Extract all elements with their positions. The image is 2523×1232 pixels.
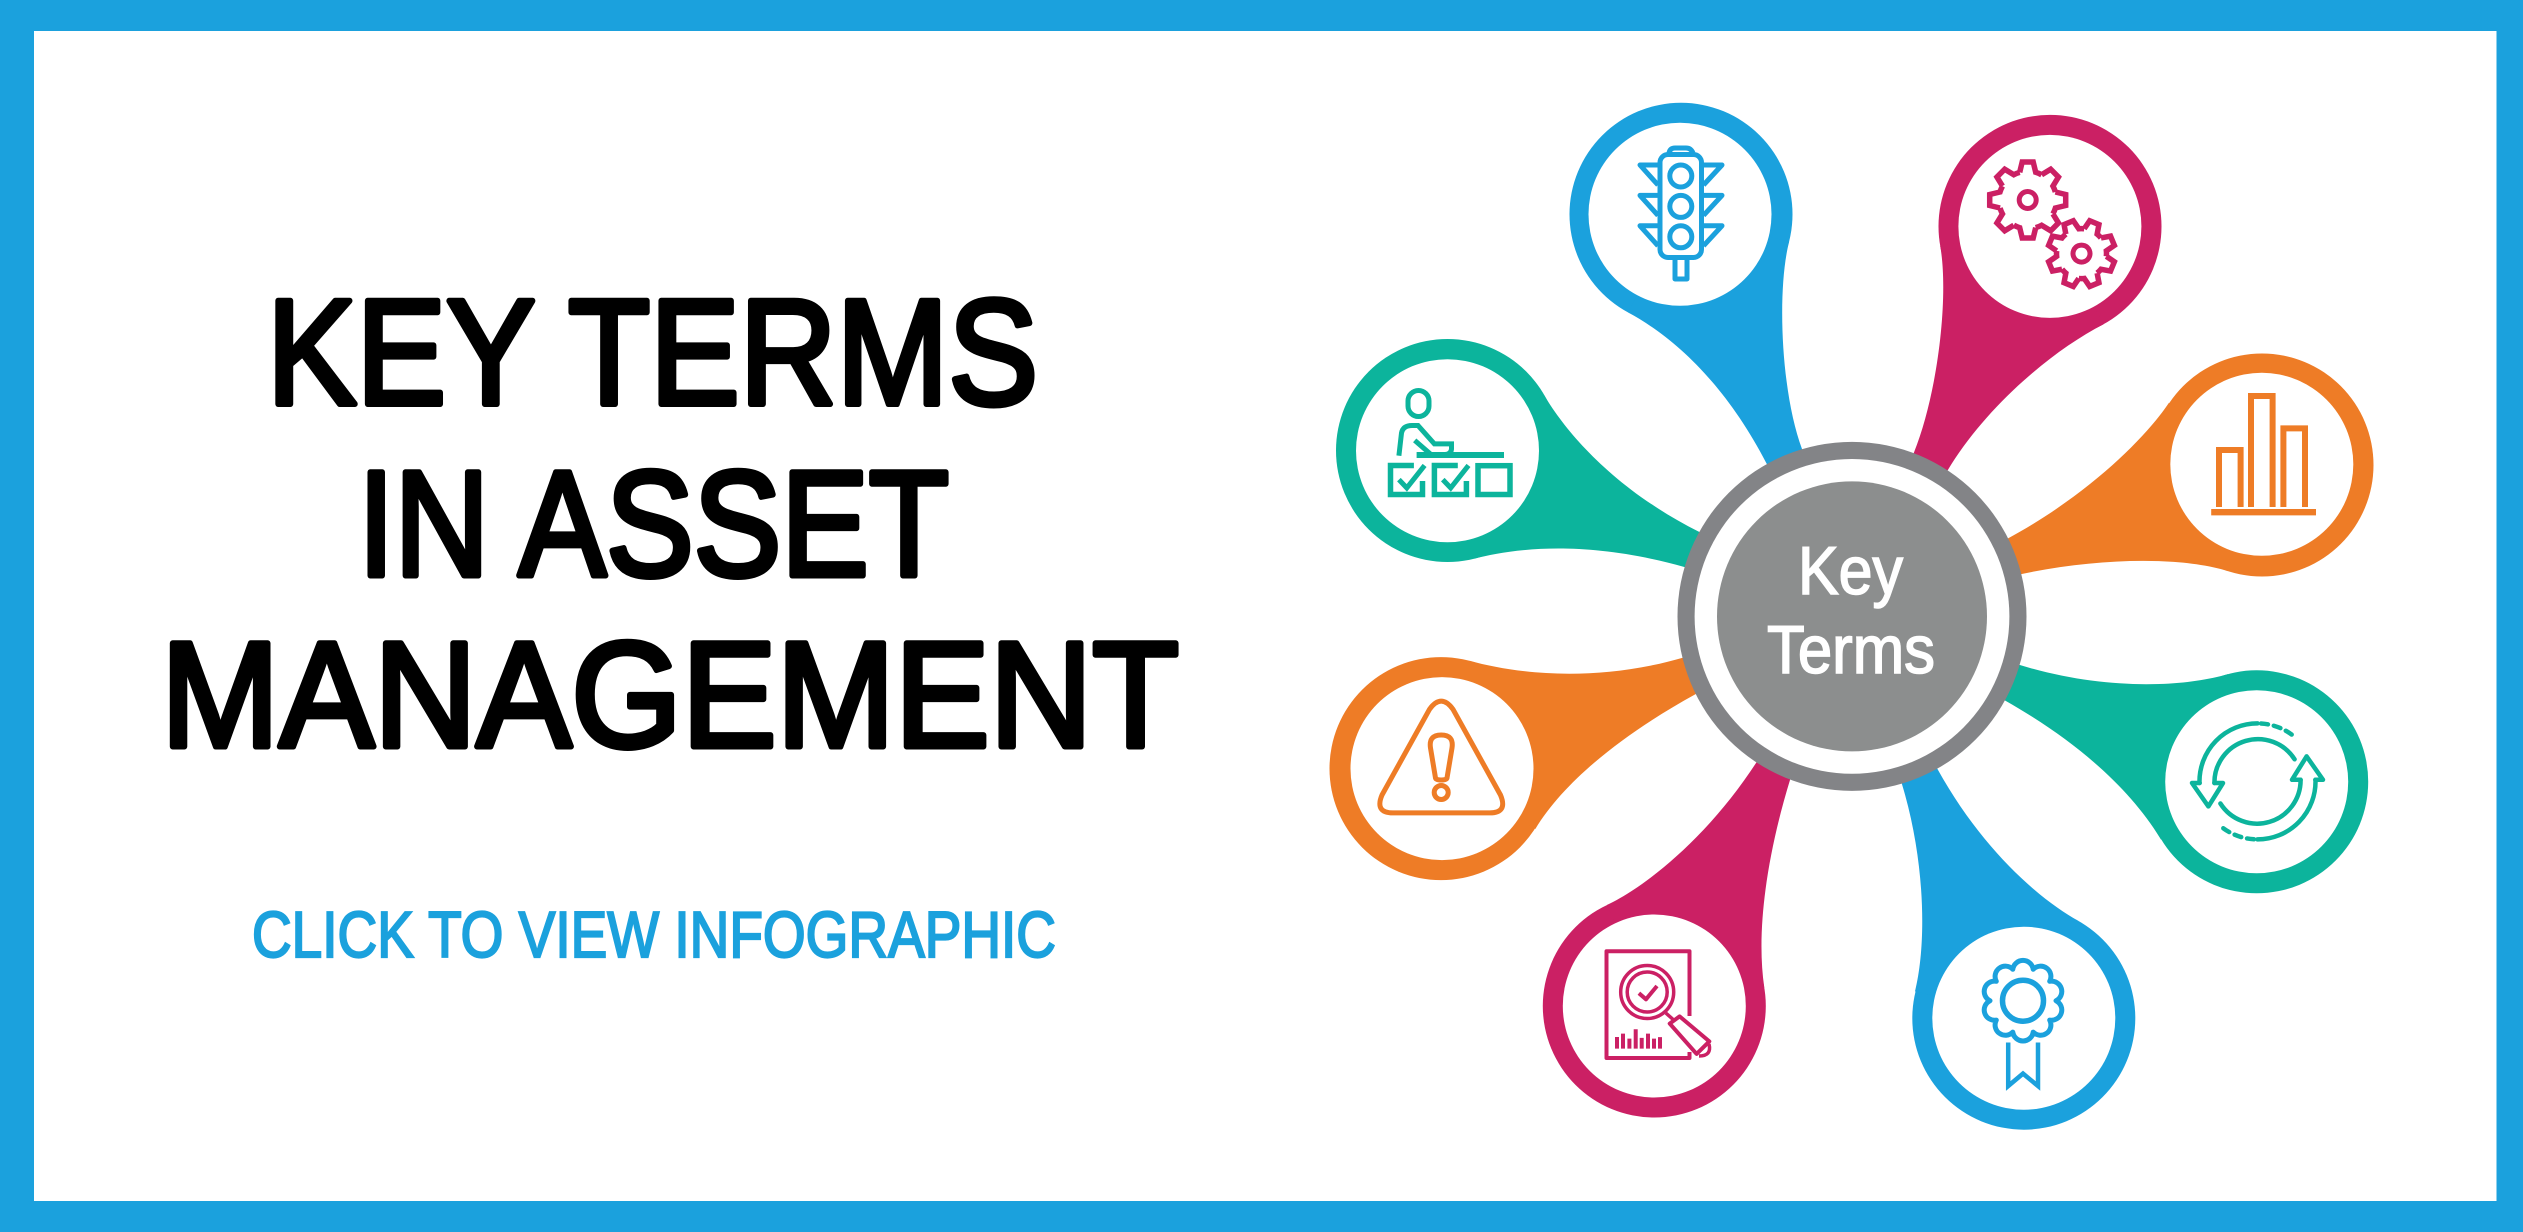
icon: rosette medal <box>1984 960 2062 1086</box>
icon: recycle arrows <box>2192 723 2323 839</box>
icon: gears <box>1990 162 2125 297</box>
title: KEY TERMS <box>267 268 1038 436</box>
petal: audit report, magenta <box>1543 616 1852 1118</box>
petal: warning, orange <box>1330 616 1852 880</box>
icon: person with checklist <box>1390 390 1510 494</box>
petal: quality medal, blue <box>1852 616 2135 1130</box>
icon: warning triangle <box>1380 701 1503 813</box>
call to action: CLICK TO VIEW INFOGRAPHIC <box>252 898 1056 971</box>
title <box>161 268 1179 778</box>
hub label: Key <box>1798 533 1903 609</box>
central hub <box>1678 442 2026 791</box>
petal: cycle, teal <box>1852 616 2368 893</box>
hub label <box>1767 533 1935 688</box>
hub label: Terms <box>1767 612 1935 688</box>
petal: bar chart, orange <box>1852 354 2374 616</box>
icon: bar chart <box>2211 396 2316 512</box>
petal: traffic light, blue <box>1570 103 1852 616</box>
petal: gears, magenta <box>1852 115 2162 616</box>
icon: magnified report <box>1606 951 1710 1058</box>
petal: inspection checklist, teal <box>1336 339 1852 616</box>
title: MANAGEMENT <box>161 610 1179 778</box>
icon: traffic light <box>1640 148 1722 279</box>
title: IN ASSET <box>358 440 949 608</box>
